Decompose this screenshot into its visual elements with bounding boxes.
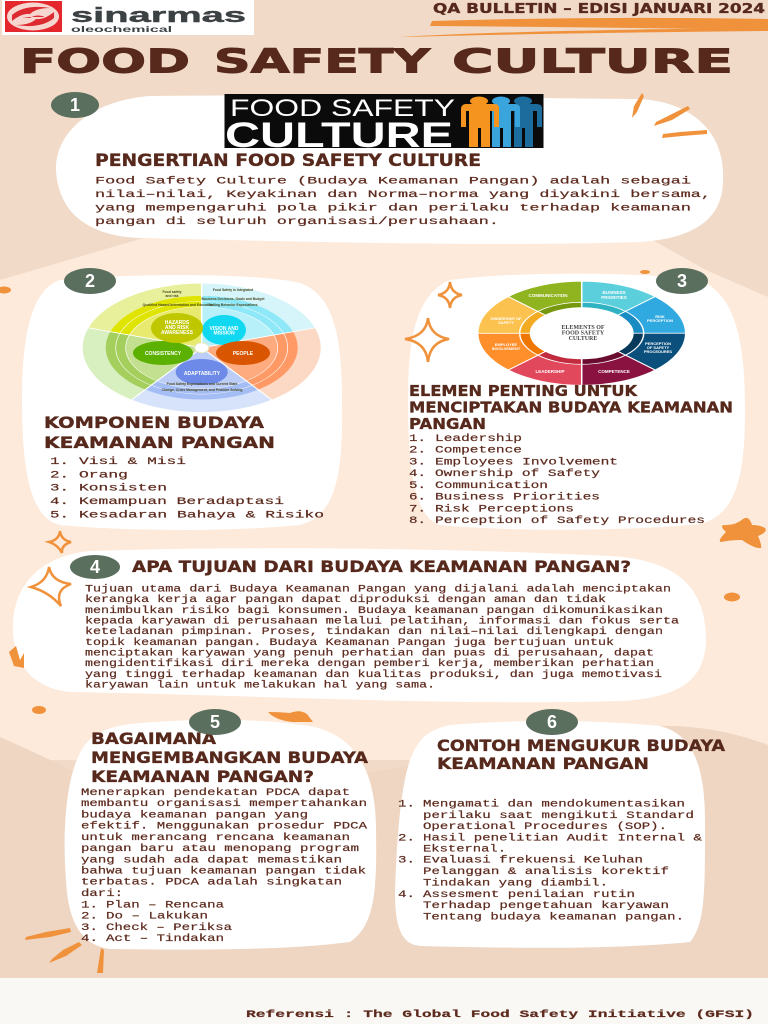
heading: KOMPONEN BUDAYA [44, 413, 265, 432]
component list: Orang [79, 470, 128, 482]
company logo: oleochemical [71, 25, 172, 34]
element list: 4. [409, 468, 426, 480]
badge 3: 3 [677, 271, 687, 291]
wheel of components: Business Decisions, Goals and Budget [202, 297, 265, 301]
measurement list: 4. [398, 889, 415, 901]
element list: Employees Involvement [435, 456, 618, 468]
pdca text: membantu organisasi mempertahankan [81, 798, 367, 810]
component list: Kesadaran Bahaya & Risiko [79, 510, 324, 522]
main title [20, 42, 733, 80]
reference line: Referensi : The Global Food Safety Initiative (GFSI) [246, 1009, 754, 1021]
elements wheel: INVOLVEMENT [492, 346, 521, 351]
pdca text: yang sudah ada dapat memastikan [81, 854, 342, 866]
badge 4: 4 [90, 557, 100, 577]
measurement list: Pelanggan & analisis korektif [423, 866, 669, 878]
badge 1 [51, 92, 99, 118]
component list: 2. [50, 470, 69, 482]
component list: 4. [50, 496, 69, 508]
measurement list: 1. [398, 798, 415, 810]
heading [409, 382, 733, 433]
elements wheel: OWNERSHIP OF [490, 316, 522, 321]
pdca text [81, 787, 368, 945]
elements wheel: PROCEDURES [644, 349, 672, 354]
panel 3: elements [408, 274, 745, 530]
pdca text: Check – Periksa [106, 922, 232, 934]
accent strokes near panel 1 [632, 93, 707, 138]
element list: Ownership of Safety [435, 468, 600, 480]
purpose text: kerangka kerja agar pangan dapat diproduksi dengan aman dan tidak [85, 594, 606, 606]
component list: 3. [50, 482, 69, 494]
food safety culture banner: CULTURE [225, 116, 453, 155]
purpose text: menimbulkan risiko bagi konsumen. Budaya keamanan pangan dikomunikasikan [85, 605, 663, 617]
elements wheel: PRIORITIES [601, 295, 627, 300]
element list: Competence [435, 444, 522, 456]
component list: Visi & Misi [79, 456, 186, 468]
pdca text: Do – Lakukan [106, 910, 208, 922]
main title: CULTURE [452, 42, 733, 80]
heading: CONTOH MENGUKUR BUDAYA [437, 736, 726, 755]
wheel of components: HAZARDS [165, 320, 190, 326]
elements wheel: PERCEPTION [647, 318, 673, 323]
element list: Leadership [435, 433, 522, 445]
definition text: Food Safety Culture (Budaya Keamanan Pangan) adalah sebagai [95, 176, 691, 188]
purpose text: Tujuan utama dari Budaya Keamanan Pangan yang dijalani adalah menciptakan [85, 584, 671, 596]
wheel of components: ADAPTABILITY [184, 371, 221, 377]
pdca text: 2. [81, 910, 98, 922]
measurement list: Hasil penelitian Audit Internal & [423, 832, 703, 844]
heading: KEAMANAN PANGAN? [91, 767, 314, 786]
definition text [95, 176, 711, 228]
heading: PANGAN [409, 415, 486, 433]
heading [44, 413, 275, 452]
badge 2: 2 [85, 271, 95, 291]
badge 6: 6 [547, 712, 557, 732]
purpose text: mengidentifikasi diri mereka dengan pemberi kerja, memberikan perhatian [85, 658, 654, 670]
component list: 5. [50, 510, 69, 522]
elements wheel: FOOD SAFETY [562, 330, 605, 336]
wheel of components: Food safety [162, 290, 182, 294]
element list: 5. [409, 480, 426, 492]
panel 5: how to develop [65, 720, 376, 950]
wheel of components: AWARENESS [161, 330, 194, 336]
measurement list: Evaluasi frekuensi Keluhan [423, 854, 643, 866]
measurement list: Mengamati dan mendokumentasikan [423, 798, 685, 810]
element list: 3. [409, 456, 426, 468]
badge 1: 1 [70, 95, 80, 115]
bulletin edition header [400, 2, 768, 37]
measurement list [398, 798, 703, 924]
measurement list: perilaku saat mengikuti Standard [423, 810, 694, 822]
wheel of components: Qualified Hazard Information and Education [143, 303, 213, 307]
pdca text: efektif. Menggunakan prosedur PDCA [81, 820, 368, 832]
panel 6: measuring examples [395, 721, 726, 948]
element list: Risk Perceptions [435, 504, 574, 516]
measurement list: 2. [398, 832, 415, 844]
badge 4 [70, 555, 120, 579]
pdca text: 1. [81, 900, 98, 912]
purpose text [85, 584, 679, 692]
purpose text: karyawan lain untuk melakukan hal yang sama. [85, 680, 435, 692]
measurement list: Terhadap pengetahuan karyawan [423, 900, 669, 912]
panel 4: purpose [13, 548, 706, 702]
star and dot decorations [0, 270, 766, 722]
purpose text: menciptakan karyawan yang penuh perhatian dan puas di perusahaan, dapat [85, 648, 654, 660]
pdca text: terbatas. PDCA adalah singkatan [81, 876, 342, 888]
measurement list: 3. [398, 854, 415, 866]
component list [50, 456, 324, 522]
elements wheel: OF SAFETY [647, 345, 670, 350]
pdca text: Act – Tindakan [106, 933, 224, 945]
measurement list: Tindakan yang diambil. [423, 878, 608, 890]
measurement list: Eksternal. [423, 844, 506, 856]
element list: 2. [409, 444, 426, 456]
main title: FOOD [20, 42, 190, 80]
wheel of components: Food Safety is Integrated [213, 288, 253, 292]
elements wheel: EMPLOYEE [495, 342, 517, 347]
element list: 6. [409, 492, 426, 504]
badge 6 [526, 709, 578, 735]
pdca text: bahwa tujuan keamanan pangan tidak [81, 866, 366, 878]
heading [91, 729, 369, 786]
pdca text: pangan baru atau menopang program [81, 843, 359, 855]
pdca text: untuk merancang rencana keamanan [81, 832, 350, 844]
heading: MENGEMBANGKAN BUDAYA [91, 748, 369, 767]
elements wheel: BUSINESS [602, 290, 626, 295]
company logo [2, 0, 254, 35]
heading: APA TUJUAN DARI BUDAYA KEAMANAN PANGAN? [132, 557, 631, 576]
measurement list: Assesment penilaian rutin [423, 889, 635, 901]
wheel of components: MISSION [213, 330, 235, 336]
wheel of components: and risk [165, 294, 179, 298]
elements wheel: PERCEPTION [645, 341, 671, 346]
badge 5 [189, 709, 241, 735]
accent strokes near panel 5 [25, 928, 104, 973]
wheel of components: PEOPLE [233, 351, 254, 357]
footer band [0, 978, 768, 1024]
wheel of components [83, 283, 321, 412]
heading: MENCIPTAKAN BUDAYA KEAMANAN [409, 398, 733, 416]
purpose text: topik keamanan pangan. Budaya Keamanan Pangan juga bertujuan untuk [85, 637, 614, 649]
panel 1: definition [56, 94, 723, 244]
element list: Communication [435, 480, 548, 492]
wheel of components: Food Safety Expectations and Current State [167, 382, 238, 386]
pdca text: 3. [81, 922, 98, 934]
wheel of components: Setting Behavior Expectations [208, 303, 258, 307]
purpose text: yang tinggi terhadap keamanan dan kualitas produksi, dan juga memotivasi [85, 669, 662, 681]
element list: Perception of Safety Procedures [435, 515, 705, 527]
pdca text: dari: [81, 888, 123, 900]
elements wheel: CULTURE [569, 336, 597, 342]
elements wheel: COMMUNICATION [529, 293, 567, 298]
measurement list: Tentang budaya keamanan pangan. [423, 912, 684, 924]
company logo: sinarmas [71, 5, 246, 27]
wheel of components: VISION AND [210, 326, 239, 332]
component list: 1. [50, 456, 69, 468]
elements wheel: ELEMENTS OF [561, 325, 605, 331]
heading: ELEMEN PENTING UNTUK [409, 382, 638, 400]
measurement list: Operational Procedures (SOP). [423, 821, 667, 833]
pdca text: Menerapkan pendekatan PDCA dapat [81, 787, 350, 799]
element list: Business Priorities [435, 492, 600, 504]
heading: KEAMANAN PANGAN [437, 754, 649, 773]
component list: Kemampuan Beradaptasi [79, 496, 284, 508]
heading: BAGAIMANA [91, 729, 217, 748]
wheel of components: Change, Crisis Management, and Problem Solving [161, 388, 243, 392]
elements wheel: COMPETENCE [598, 369, 630, 374]
heading [437, 736, 726, 773]
wheel of components: AND RISK [165, 325, 189, 331]
badge 5: 5 [210, 712, 220, 732]
pdca text: 4. [81, 933, 98, 945]
heading: PENGERTIAN FOOD SAFETY CULTURE [95, 151, 481, 171]
definition text: nilai–nilai, Keyakinan dan Norma–norma yang diyakini bersama, [95, 189, 711, 201]
element list: 1. [409, 433, 426, 445]
main title: SAFETY [214, 42, 432, 80]
elements wheel: LEADERSHIP [535, 369, 565, 374]
elements wheel [478, 281, 686, 385]
element list [409, 433, 705, 527]
element list: 7. [409, 504, 426, 516]
panel 2: components [22, 275, 342, 530]
badge 3 [656, 268, 708, 294]
pdca text: budaya keamanan pangan yang [81, 810, 308, 822]
purpose text: kepada karyawan di perusahaan melalui pelatihan, informasi dan fokus serta [85, 616, 679, 628]
sparkle icons [31, 282, 462, 606]
heading: KEAMANAN PANGAN [44, 433, 275, 452]
badge 2 [64, 268, 116, 294]
food safety culture banner: FOOD SAFETY [230, 95, 455, 122]
definition text: yang mempengaruhi pola pikir dan perilaku terhadap keamanan [95, 202, 691, 214]
definition text: pangan di seluruh organisasi/perusahaan. [95, 216, 499, 228]
elements wheel: SAFETY [498, 320, 514, 325]
wheel of components: CONSISTENCY [145, 351, 182, 357]
elements wheel: RISK [655, 314, 665, 319]
element list: 8. [409, 515, 426, 527]
pdca text: Plan – Rencana [106, 900, 224, 912]
purpose text: keteladanan pimpinan. Proses, tindakan dan nilai–nilai dilengkapi dengan [85, 626, 663, 638]
bulletin edition header: QA BULLETIN – EDISI JANUARI 2024 [433, 2, 765, 17]
component list: Konsisten [79, 482, 167, 494]
food safety culture banner [224, 94, 544, 155]
